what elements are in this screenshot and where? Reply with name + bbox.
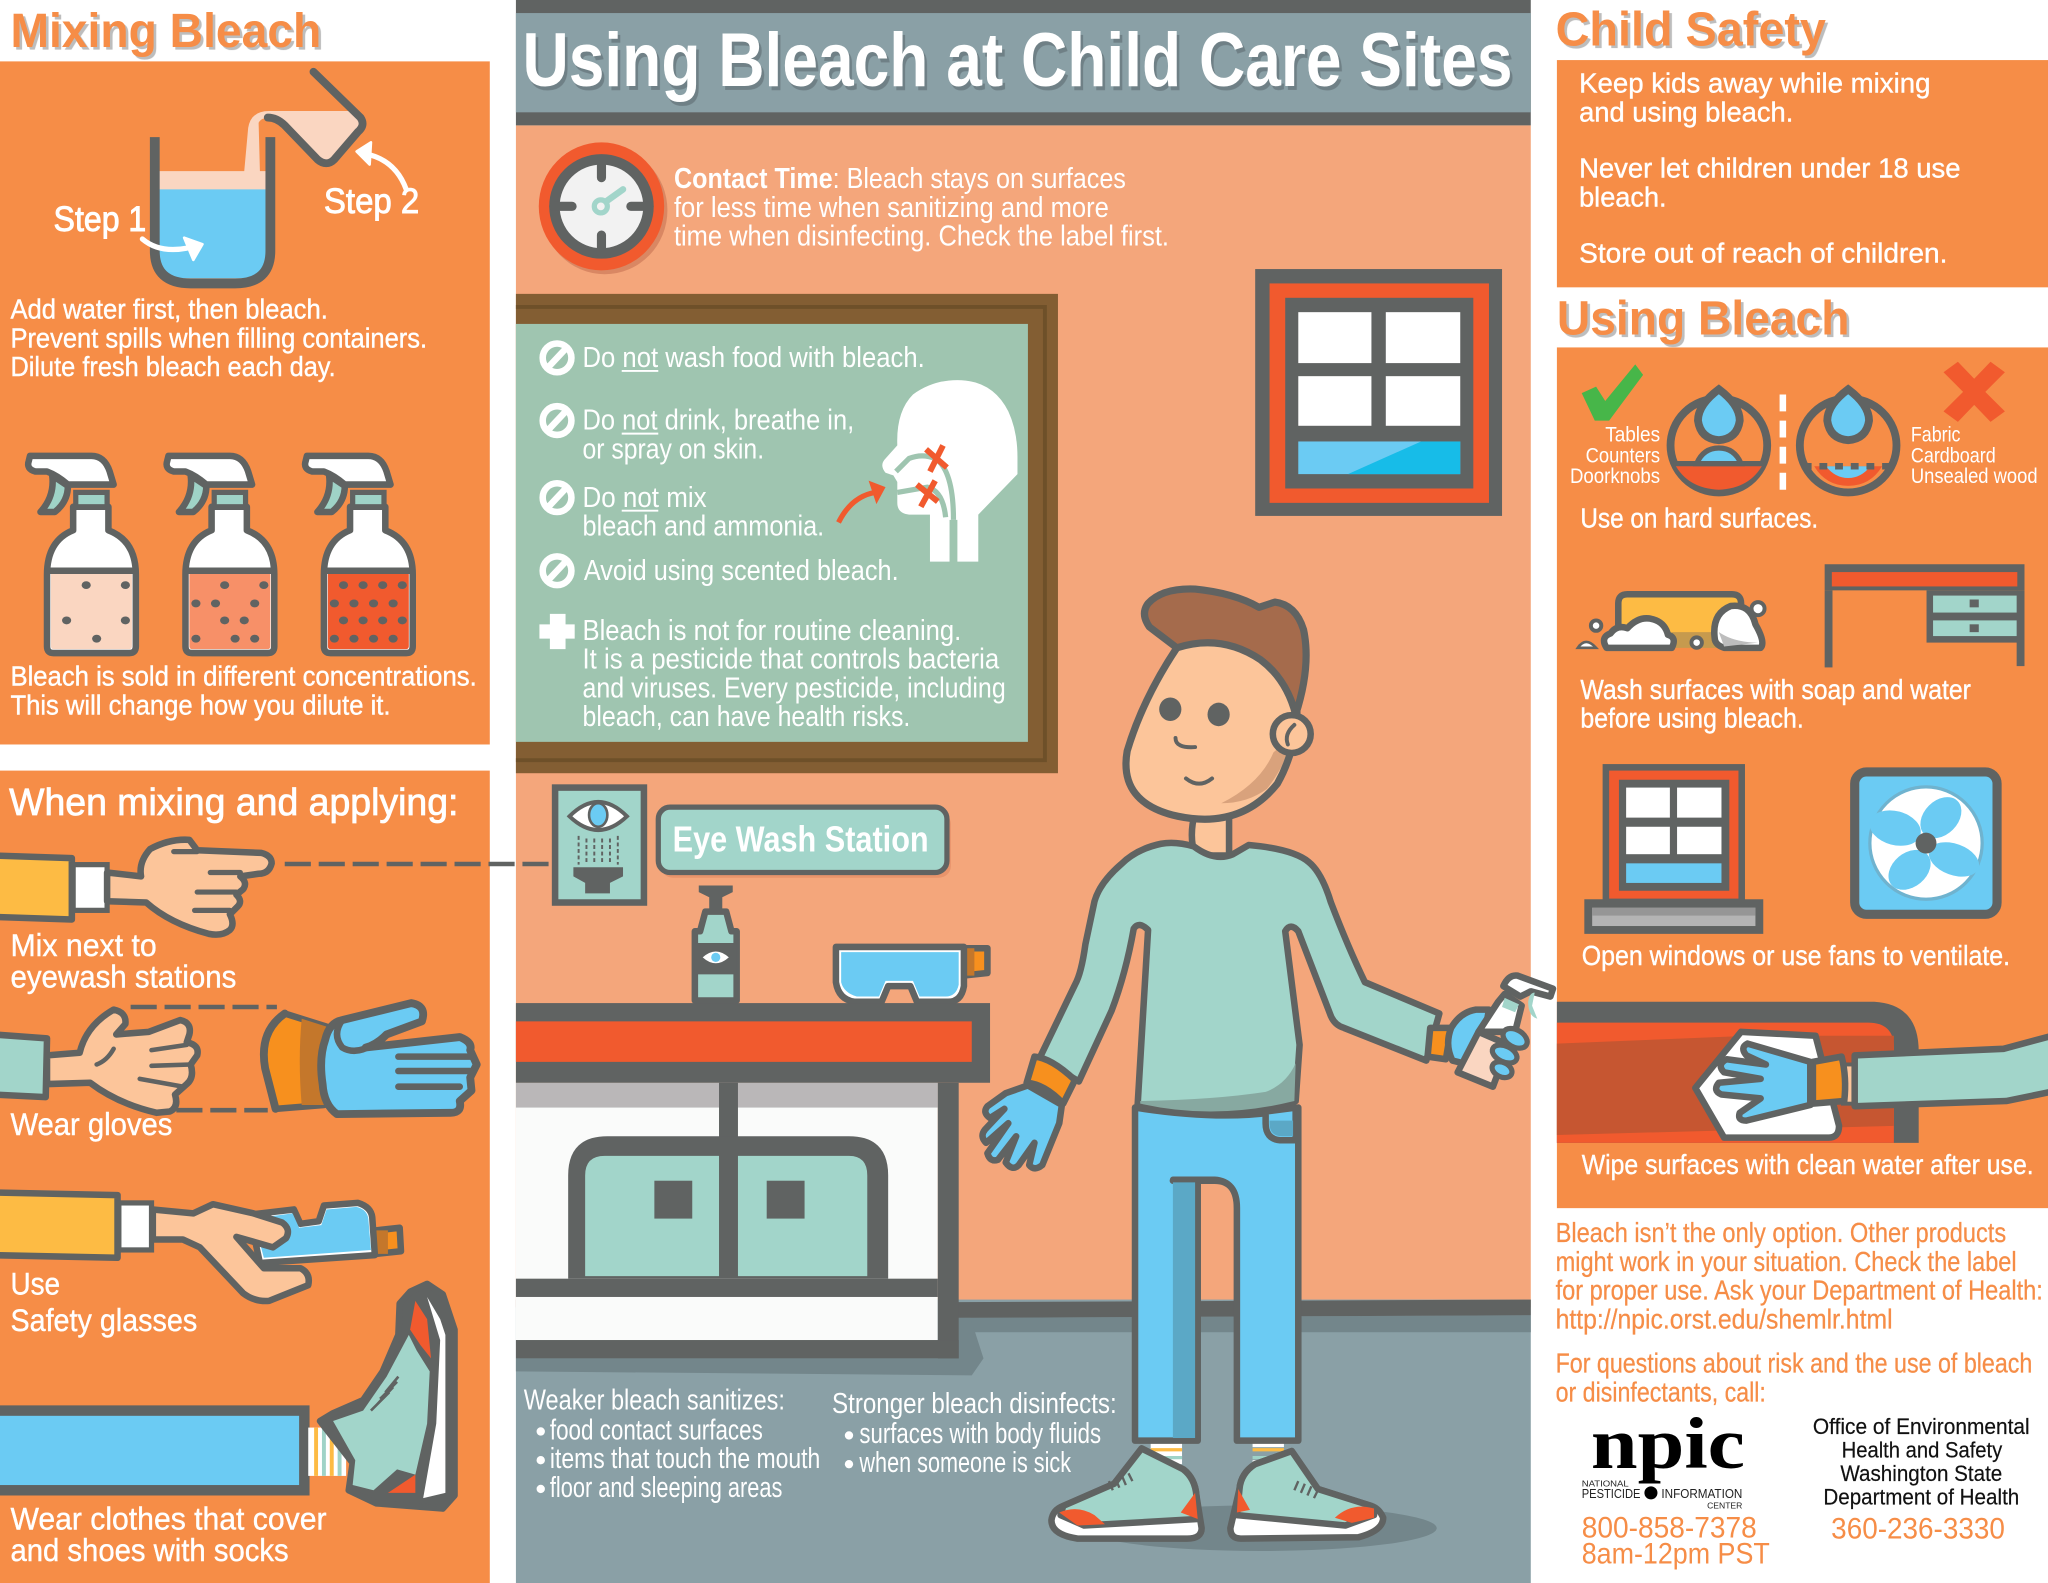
text: board warnings: It is a pesticide that controls bacteria [583, 644, 999, 676]
icon: green check mark [1582, 364, 1643, 421]
logo: npic: PESTICIDE [1582, 1486, 1641, 1501]
label: porous surfaces list [1911, 423, 2038, 488]
panel: center scene [285, 0, 1553, 1583]
panel: child safety: Never let children under 18 use [1579, 153, 1960, 184]
panel: using bleach [1557, 347, 2048, 1208]
label: Mix next to eyewash stations: eyewash stations [10, 959, 236, 994]
panel: mixing bleach [0, 61, 490, 744]
panel: green bulletin board [516, 294, 1058, 773]
text: contact time: for less time when sanitizing and more [674, 192, 1109, 224]
text: Washington office: Health and Safety [1842, 1438, 2003, 1463]
text: questions call: or disinfectants, call: [1556, 1376, 1766, 1407]
text: Washington office: Office of Environmental [1813, 1414, 2030, 1439]
icon: droplet beading on hard surface [1671, 389, 1767, 492]
text: concentrations note: This will change how you dilute it. [10, 689, 391, 720]
heading: Mixing Bleach: Mixing Bleach [10, 4, 321, 58]
text: npic phone [1582, 1511, 1770, 1570]
icon: head with airway [839, 380, 1017, 562]
icon: plus sign [539, 614, 575, 649]
label: Use Safety glasses: Safety glasses [10, 1303, 197, 1338]
text: weaker bleach: items that touch the mouth [550, 1443, 820, 1475]
text: concentrations note: Bleach is sold in different concentrations. [10, 661, 477, 692]
text: stronger bleach: surfaces with body fluids [859, 1418, 1101, 1450]
logo: npic: npic [1591, 1403, 1745, 1484]
icon: no symbol 3 [543, 483, 571, 512]
illustration: hand holding safety glasses [0, 1192, 401, 1301]
divider dashed line [1780, 394, 1785, 490]
logo: npic: NATIONAL [1582, 1478, 1629, 1488]
icon: red X [1944, 362, 2005, 422]
text: weaker bleach: Weaker bleach sanitizes: [524, 1384, 785, 1416]
text: board warnings: bleach, can have health risks. [583, 701, 910, 733]
text: weaker bleach [524, 1384, 820, 1504]
text: other options note [1556, 1217, 2043, 1334]
icon: spray bottle medium [167, 456, 274, 653]
cabinet doors [568, 1136, 888, 1279]
panel: child safety: bleach. [1579, 181, 1667, 212]
label: Wear gloves: Wear gloves [10, 1107, 172, 1142]
icon: eye wash bottle [695, 886, 737, 1000]
logo: npic [1582, 1403, 1745, 1511]
text: concentrations note [10, 661, 477, 720]
text: Washington office: Washington State [1840, 1461, 2002, 1486]
icon: spray bottle strong [305, 456, 413, 653]
text: contact time: Contact Time: Bleach stays on surfaces [674, 163, 1126, 195]
label: Wear clothes and shoes [10, 1501, 327, 1568]
icon: open window [1584, 764, 1763, 934]
text: mixing instructions: Prevent spills when filling containers. [10, 322, 427, 353]
text: stronger bleach [832, 1388, 1117, 1479]
text: use on hard surfaces: Use on hard surfaces. [1580, 503, 1818, 534]
text: questions call [1556, 1348, 2032, 1407]
illustration: leg with pants sock and shoe [0, 1284, 455, 1509]
text: board warnings: Do not wash food with bleach. [583, 342, 925, 374]
panel: when mixing and applying [0, 771, 490, 1583]
text: board warnings: or spray on skin. [583, 433, 764, 465]
person: sweater shadow [1140, 1063, 1296, 1112]
icon: fan [1855, 772, 1997, 914]
text: wash surfaces [1580, 674, 1971, 734]
text: other options note: http://npic.orst.edu/shemlr.html [1556, 1303, 1893, 1334]
panel: child safety: and using bleach. [1579, 96, 1793, 127]
sign: eye wash station icon [555, 788, 644, 903]
label: hard surfaces list: Doorknobs [1570, 465, 1660, 488]
text: npic phone: 800-858-7378 [1582, 1511, 1757, 1544]
person: face and head [1126, 589, 1311, 819]
text: ventilate: Open windows or use fans to ventilate. [1582, 940, 2010, 971]
text: weaker bleach: floor and sleeping areas [550, 1472, 782, 1504]
label: Eye Wash Station [658, 807, 951, 878]
label: Step 1 with arrow [54, 200, 202, 260]
text: board warnings: Bleach is not for routine cleaning. [583, 615, 961, 647]
label: Wear clothes and shoes: Wear clothes that cover [10, 1501, 327, 1536]
text: contact time: time when disinfecting. Check the label first. [674, 221, 1169, 253]
icon: no symbol 1 [543, 344, 571, 372]
panel: child safety [1557, 60, 2048, 287]
icon: spray bottle weak [28, 456, 136, 653]
label: porous surfaces list: Fabric [1911, 423, 1960, 446]
person: pants [1135, 1108, 1298, 1441]
text: mixing instructions: Dilute fresh bleach each day. [10, 351, 336, 382]
heading: Child Safety: Child Safety [1556, 3, 1826, 57]
label: Mix next to eyewash stations [10, 928, 236, 994]
logo: npic: INFORMATION [1661, 1486, 1742, 1501]
label: Step 1 with arrow: Step 1 [54, 200, 146, 239]
heading: When mixing and applying: When mixing and applying: [9, 782, 458, 824]
icon: no symbol 4 [543, 556, 571, 585]
illustration: bare hand and glove [0, 1003, 477, 1114]
label: Step 2 with arrow: Step 2 [324, 182, 419, 221]
label: Step 2 with arrow [324, 142, 419, 221]
text: board warnings [583, 342, 1006, 733]
text: wash surfaces: before using bleach. [1580, 703, 1804, 734]
icon: beaker with jug pouring bleach [155, 72, 364, 283]
person: right hand with spray bottle [1428, 976, 1553, 1087]
title: Using Bleach at Child Care Sites [522, 18, 1512, 103]
text: state phone: 360-236-3330 [1831, 1513, 2005, 1546]
counter and cabinet [516, 1003, 990, 1358]
icon: desk [1825, 564, 2024, 667]
text: board warnings: Avoid using scented bleach. [584, 555, 899, 587]
person: left glove [982, 1057, 1075, 1168]
icon: droplet absorbed in porous surface [1800, 389, 1896, 492]
text: wash surfaces: Wash surfaces with soap and water [1580, 674, 1971, 705]
person: neck [1192, 812, 1229, 855]
label: hard surfaces list: Tables [1605, 423, 1660, 446]
panel: child safety: Store out of reach of children. [1579, 238, 1947, 269]
panel: child safety: Keep kids away while mixing [1579, 68, 1930, 99]
icon: wall window [1255, 269, 1502, 516]
label: Use Safety glasses: Use [10, 1266, 60, 1301]
label: Use Safety glasses [10, 1266, 197, 1338]
title bar [516, 0, 1531, 125]
floor [516, 1300, 1531, 1583]
illustration: person [982, 589, 1553, 1539]
icon: no symbol 2 [543, 406, 571, 435]
label: Wear clothes and shoes: and shoes with socks [10, 1533, 289, 1568]
label: porous surfaces list: Cardboard [1911, 444, 1996, 467]
text: board warnings: bleach and ammonia. [583, 511, 824, 543]
icon: soap and bubbles [1578, 594, 1765, 648]
wall [516, 125, 1531, 1307]
dashed line to eye wash station [285, 862, 549, 866]
text: board warnings: Do not drink, breathe in, [583, 405, 854, 437]
icon: safety goggles on counter [836, 947, 987, 1002]
text: weaker bleach: food contact surfaces [550, 1414, 763, 1446]
person: shoes and socks [1051, 1443, 1383, 1539]
text: stronger bleach: when someone is sick [859, 1447, 1071, 1479]
text: board warnings: and viruses. Every pesticide, including [583, 672, 1006, 704]
text: contact time [674, 163, 1169, 253]
text: Washington office [1813, 1414, 2030, 1510]
text: stronger bleach: Stronger bleach disinfects: [832, 1388, 1117, 1420]
illustration: pointing hand [0, 840, 272, 935]
logo: npic: CENTER [1707, 1501, 1742, 1511]
person: sweater [1040, 843, 1439, 1113]
icon: clock [539, 142, 667, 274]
text: mixing instructions: Add water first, then bleach. [10, 294, 328, 325]
text: npic phone: 8am-12pm PST [1582, 1537, 1770, 1570]
text: mixing instructions [10, 294, 427, 382]
illustration: wiping a table [1557, 1002, 2048, 1143]
text: board warnings: Do not mix [583, 482, 707, 514]
heading: Using Bleach: Using Bleach [1557, 291, 1849, 345]
text: Washington office: Department of Health [1823, 1485, 2019, 1510]
label: Mix next to eyewash stations: Mix next to [10, 928, 157, 963]
label: Eye Wash Station: Eye Wash Station [673, 819, 929, 860]
label: hard surfaces list [1570, 423, 1660, 488]
label: hard surfaces list: Counters [1586, 444, 1660, 467]
